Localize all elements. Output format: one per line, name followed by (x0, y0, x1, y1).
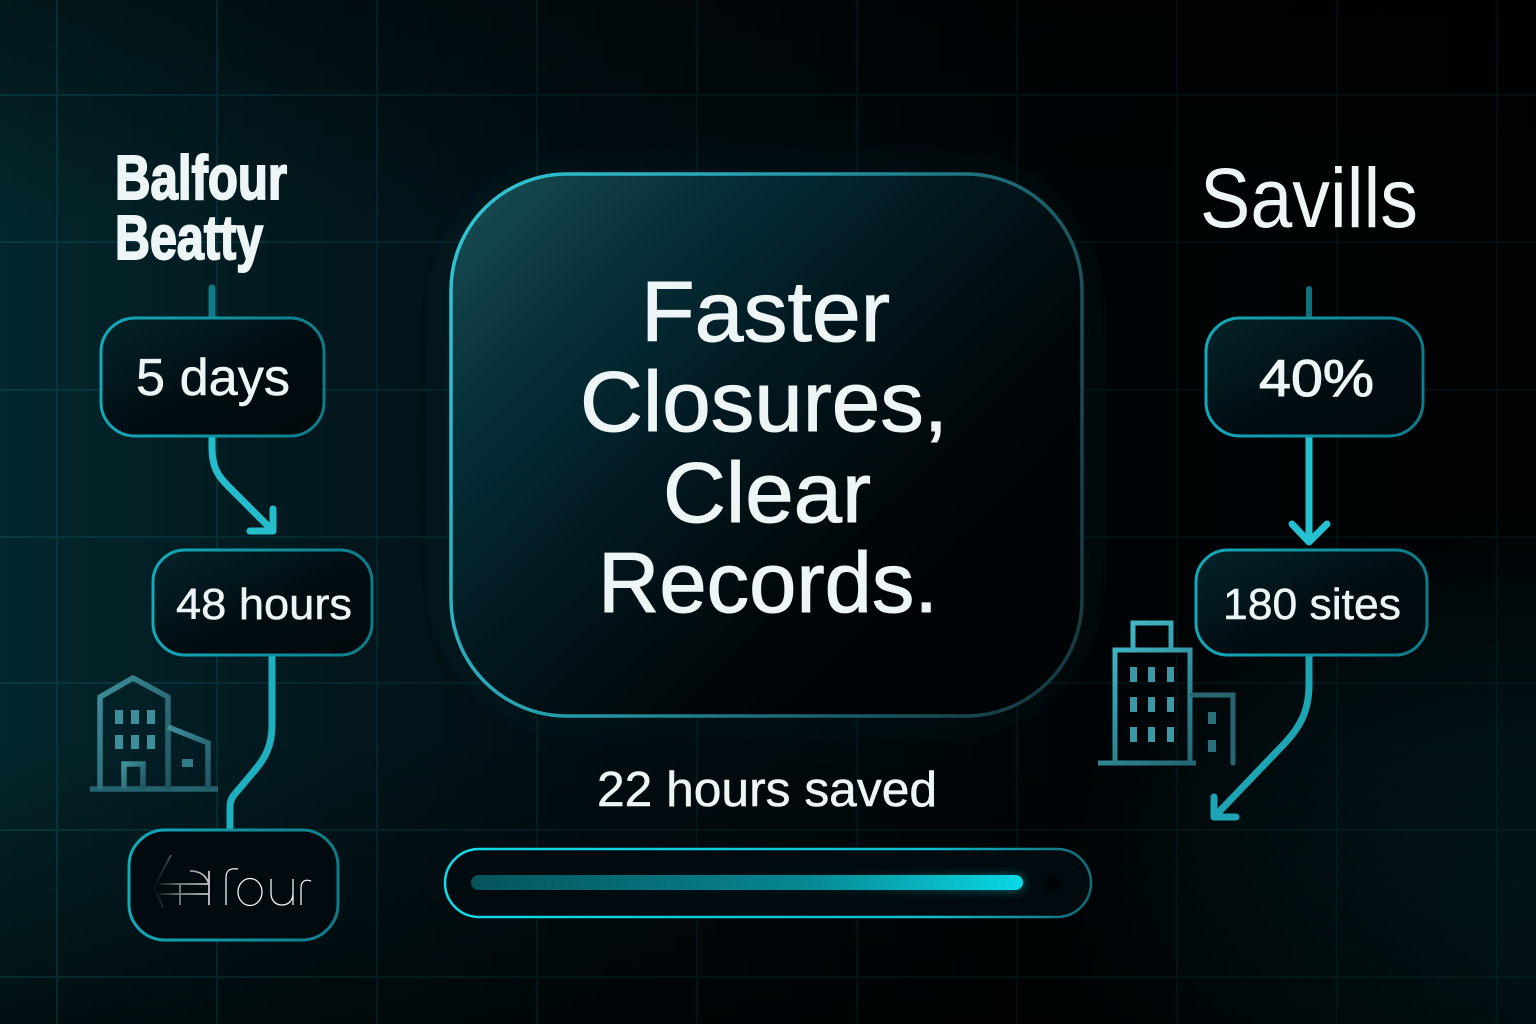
connector: logo to 40% (1306, 289, 1312, 318)
logo: four wordmark (226, 869, 311, 906)
connector: 48 hours to four (230, 655, 272, 830)
heading: headline: Records. (598, 536, 938, 631)
node: 48 hours (153, 550, 372, 655)
text: 22 hours saved: 22 hours saved (597, 763, 937, 817)
icon: left building (90, 678, 218, 789)
node: 5 days: 5 days (136, 349, 290, 407)
logo: Balfour Beatty: Beatty (115, 204, 263, 273)
node: 180 sites: 180 sites (1223, 580, 1401, 629)
connector: logo to 5 days (208, 288, 216, 318)
heading: headline: Clear (663, 446, 871, 541)
logo: garbled mark (154, 855, 209, 908)
heading: headline: Closures, (580, 355, 948, 450)
node: 40% (1206, 318, 1423, 436)
logo: Savills: Savills (1200, 151, 1418, 245)
node: 180 sites (1196, 550, 1427, 655)
logo: Balfour Beatty: Balfour (115, 144, 287, 213)
node: 5 days (101, 318, 324, 436)
icon: right building (1098, 623, 1233, 763)
panel: central headline card (451, 174, 1082, 716)
heading: headline: Faster (641, 265, 890, 360)
node: 48 hours: 48 hours (176, 580, 352, 629)
node: four (129, 830, 338, 940)
arrow: 180 sites down-left (1214, 655, 1309, 817)
progress bar (445, 849, 1091, 917)
node: 40%: 40% (1259, 350, 1374, 408)
arrow: 40% to 180 sites (1292, 436, 1327, 542)
arrow: 5 days to 48 hours (212, 436, 273, 531)
logo: Balfour Beatty (115, 144, 287, 273)
